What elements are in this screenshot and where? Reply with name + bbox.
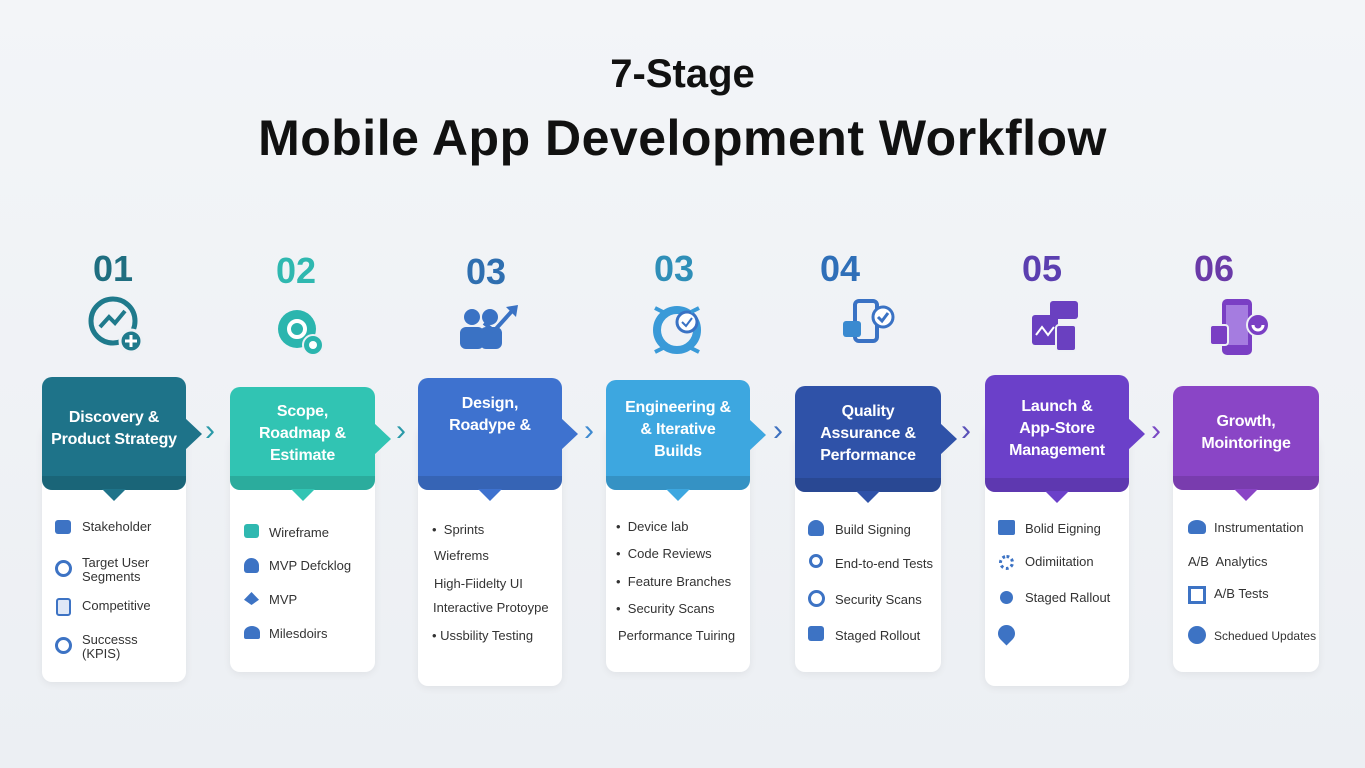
items 2: MVP Defcklog <box>269 558 351 573</box>
number 01: 01 <box>93 248 133 289</box>
title: 7-Stage: 7-Stage <box>610 52 755 96</box>
arrow 2: › <box>396 414 406 447</box>
header 5: Quality <box>842 403 894 420</box>
header 3: Design, <box>462 395 518 412</box>
arrow 5: › <box>961 414 971 447</box>
arrow 4: › <box>773 414 783 447</box>
items 6: Staged Rallout <box>1025 590 1110 605</box>
header 3: Roadype & <box>449 417 531 434</box>
stage 7 <box>1173 248 1319 673</box>
header 1: Product Strategy <box>51 430 177 448</box>
items 3: Interactive Protoype <box>433 600 549 615</box>
header 2: Estimate <box>270 446 335 464</box>
items 5: Build Signing <box>835 522 911 537</box>
items 7: Instrumentation <box>1214 520 1304 535</box>
header 1 <box>42 377 186 490</box>
header 6 <box>985 375 1129 492</box>
icon: mobile check <box>843 299 894 343</box>
items 4: • Security Scans <box>616 601 714 616</box>
header 7: Growth, <box>1216 413 1276 430</box>
header 7 <box>1173 386 1319 490</box>
title: main: Mobile App Development Workflow <box>258 110 1107 166</box>
number 06: 06 <box>1194 248 1234 289</box>
number 02: 02 <box>276 250 316 291</box>
items 6: Bolid Eigning <box>1025 521 1101 536</box>
items 5: Staged Rollout <box>835 628 920 643</box>
arrow 6: › <box>1151 414 1161 447</box>
items 7: A/B Tests <box>1214 586 1269 601</box>
header 5 <box>795 386 941 492</box>
items 1: Successs <box>82 632 138 647</box>
card 1 <box>42 425 186 682</box>
items 1: Stakeholder <box>82 519 151 534</box>
items 4: • Device lab <box>616 519 688 534</box>
card 3 <box>418 425 562 686</box>
icon: people growth <box>460 305 518 349</box>
number 04: 04 <box>820 248 860 289</box>
header 7: Mointoringe <box>1201 435 1291 452</box>
items 2: Wireframe <box>269 525 329 540</box>
header 4: Engineering & <box>625 399 731 416</box>
header 6: Launch & <box>1021 398 1093 414</box>
header 2: Roadmap & <box>259 424 346 442</box>
number 03b: 03 <box>654 248 694 289</box>
number 03: 03 <box>466 251 506 292</box>
number 05: 05 <box>1022 248 1062 289</box>
items 6 <box>998 520 1110 646</box>
stage 5 <box>795 248 957 673</box>
arrow 1: › <box>205 414 215 447</box>
items 5: Security Scans <box>835 592 922 607</box>
items 1: (KPIS) <box>82 646 120 661</box>
items 5: End-to-end Tests <box>835 556 933 571</box>
stage 2 <box>230 250 391 673</box>
header 3 <box>418 378 562 490</box>
header 5: Assurance & <box>820 425 916 442</box>
items 1: Target User <box>82 555 149 570</box>
items 6: Odimiitation <box>1025 554 1094 569</box>
header 4 <box>606 380 750 490</box>
items 3: • Sprints <box>432 522 484 537</box>
card 7 <box>1173 435 1319 672</box>
items 1 <box>55 519 152 661</box>
header 1: Discovery & <box>69 408 159 426</box>
items 1: Competitive <box>82 598 151 613</box>
items 2: MVP <box>269 592 297 607</box>
icon: cycle clock <box>653 306 701 354</box>
header 4: Builds <box>654 443 702 460</box>
items 4: Performance Tuiring <box>618 628 735 643</box>
items 3: • Ussbility Testing <box>432 628 533 643</box>
items 7: A/B Analytics <box>1188 554 1267 569</box>
items 3: Wiefrems <box>434 548 489 563</box>
icon: store windows <box>1032 301 1078 350</box>
items 1: Segments <box>82 569 141 584</box>
header 2 <box>230 387 375 490</box>
icon: phone dashboard <box>1211 299 1268 355</box>
items 3 <box>432 522 549 643</box>
stage 1 <box>42 248 202 683</box>
items 5 <box>808 520 933 643</box>
items 4: • Code Reviews <box>616 546 712 561</box>
items 4: • Feature Branches <box>616 574 731 589</box>
header 4: & Iterative <box>640 421 716 438</box>
items 2: Milesdoirs <box>269 626 328 641</box>
arrow 3: › <box>584 414 594 447</box>
header 5: Performance <box>820 447 916 464</box>
icon: gear cycle <box>278 310 322 354</box>
header 6: App-Store <box>1019 420 1095 436</box>
header 2: Scope, <box>277 402 328 420</box>
stage 6 <box>985 248 1145 687</box>
items 3: High-Fiidelty UI <box>434 576 523 591</box>
card 6 <box>985 423 1129 686</box>
items 4 <box>616 519 735 643</box>
card 4 <box>606 427 750 672</box>
card 2 <box>230 435 375 672</box>
items 7: Schedued Updates <box>1214 629 1316 643</box>
stage 3 <box>418 251 578 687</box>
stage 4 <box>606 248 766 673</box>
items 7 <box>1188 520 1316 644</box>
icon: growth chart <box>88 296 140 350</box>
card 5 <box>795 435 941 672</box>
header 6: Management <box>1009 442 1105 458</box>
items 2 <box>244 524 351 641</box>
